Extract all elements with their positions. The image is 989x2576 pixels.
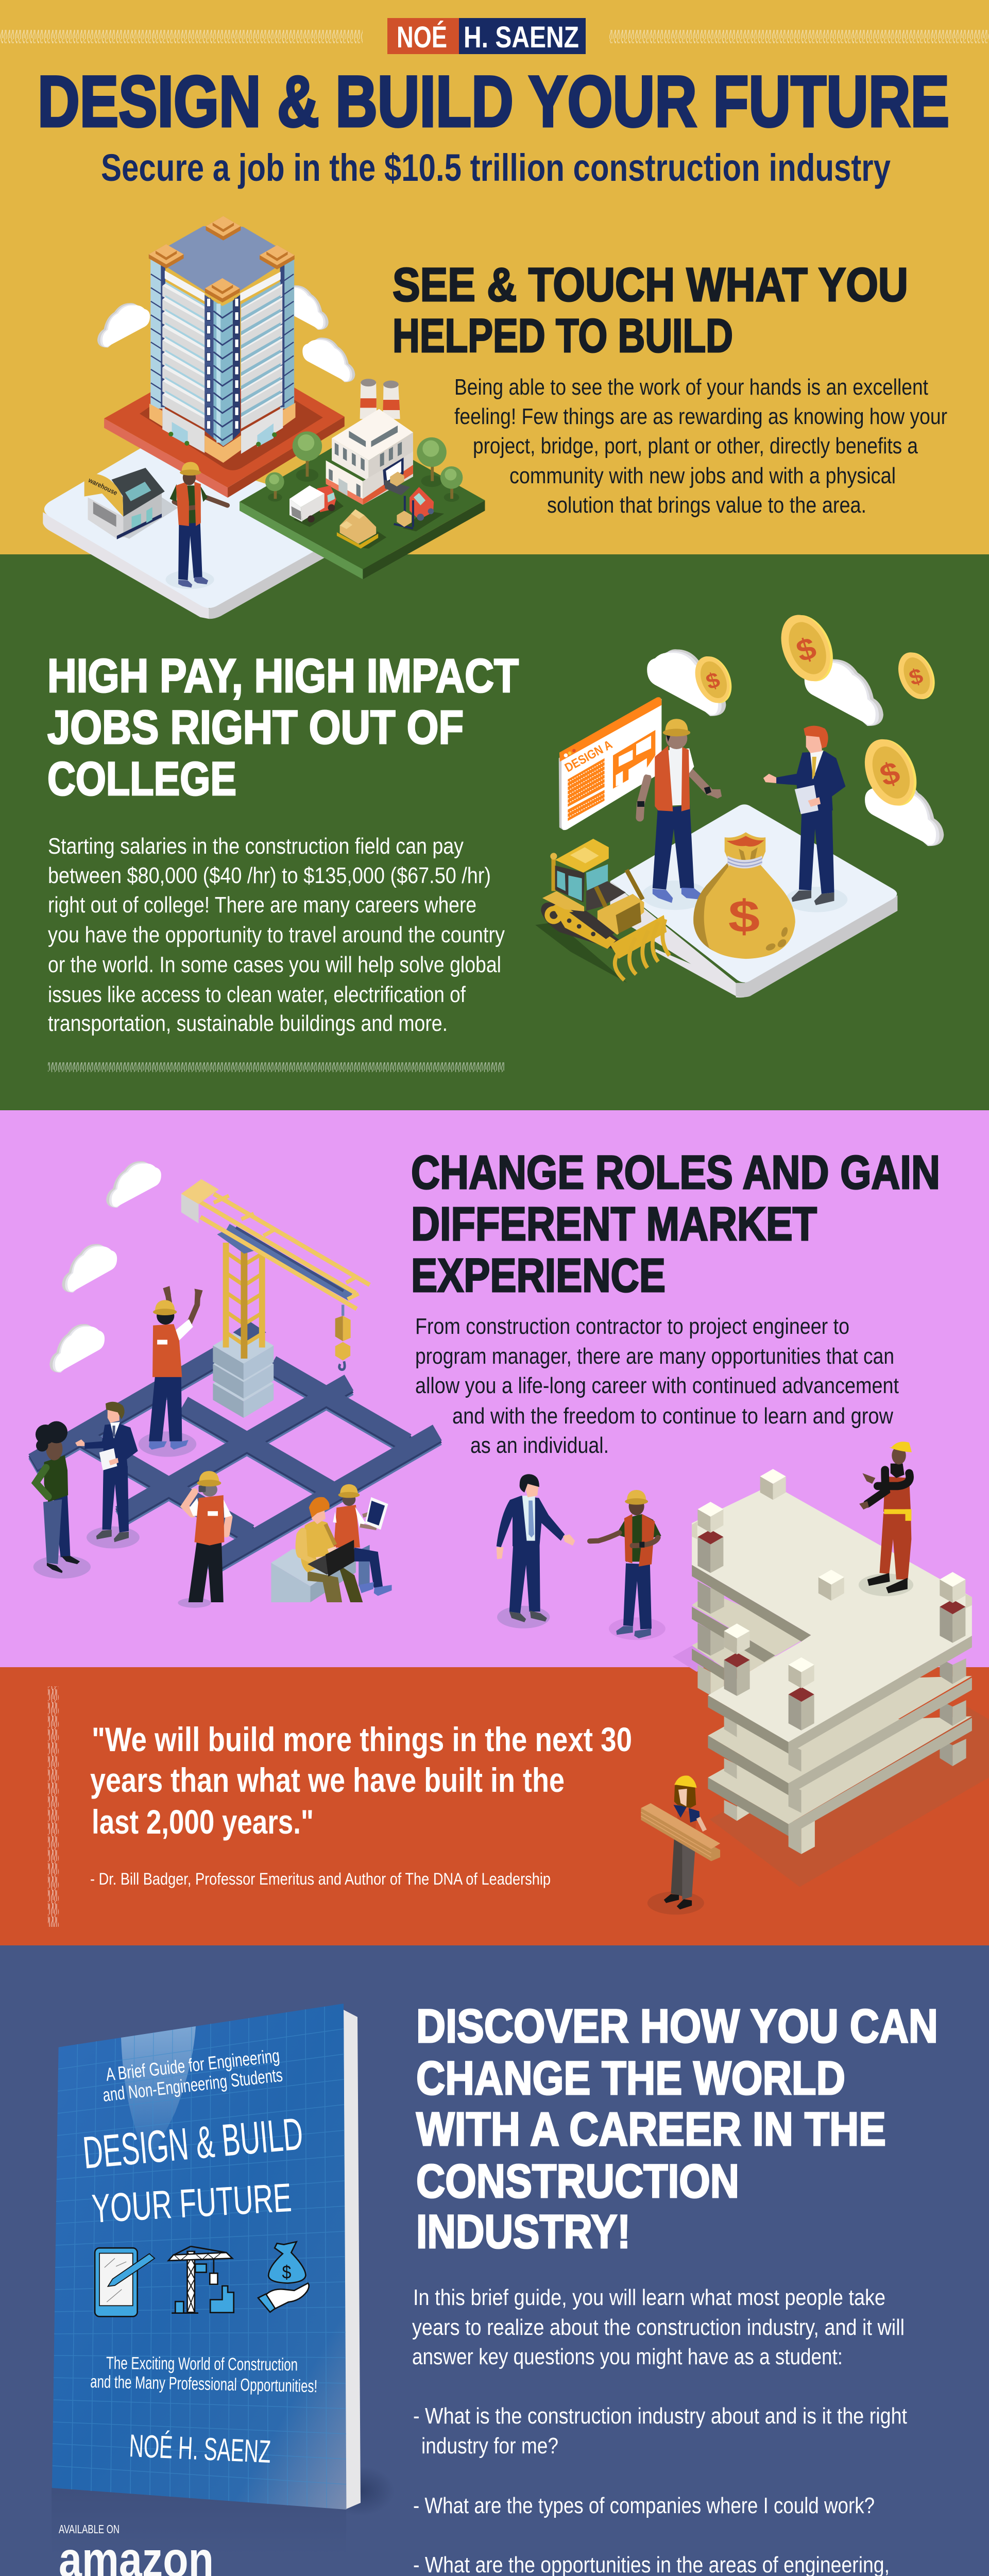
pattern strip: header right <box>609 30 989 43</box>
icon: coin small right <box>892 647 941 704</box>
icon: crane tower and jib <box>181 1179 370 1370</box>
text: book tagline: and the Many Professional Opportunities! <box>90 2372 318 2396</box>
list item: question one: - What is the construction industry about and is it the right <box>413 2403 907 2429</box>
icon: conveyor with box <box>384 471 410 495</box>
text: book subtitle: and Non-Engineering Students <box>101 2064 284 2106</box>
icon: money bag on hand <box>258 2242 309 2312</box>
icon: woman with green top <box>33 1421 91 1579</box>
text block: see and touch paragraph: project, bridge, port, plant or other, directly benefits a <box>473 433 918 459</box>
heading: high pay: JOBS RIGHT OUT OF <box>47 701 464 754</box>
text block: guide intro: years to realize about the construction industry, and it will <box>412 2315 905 2340</box>
icon: red tower platform <box>104 387 345 498</box>
panel: pink change roles section background <box>0 1110 989 1667</box>
text block: high pay paragraph: or the world. In some cases you will help solve global <box>48 952 501 977</box>
icon: worker in orange vest <box>637 719 722 910</box>
text: book tagline: The Exciting World of Construction <box>106 2353 298 2375</box>
text block: change roles paragraph: program manager, there are many opportunities that can <box>415 1344 894 1369</box>
logo: Noé H. Saenz top: NOÉ <box>397 21 447 54</box>
icon: book front cover <box>52 2004 346 2510</box>
text block: high pay paragraph: you have the opportunity to travel around the country <box>48 922 505 947</box>
text block: change roles paragraph: as an individual. <box>470 1433 609 1458</box>
icon: floor plan design board <box>559 697 661 831</box>
panel: orange quote section background <box>0 1667 989 1945</box>
icon: white platform <box>610 804 897 997</box>
text: book subtitle: A Brief Guide for Engineering <box>105 2045 281 2085</box>
heading: see and touch: HELPED TO BUILD <box>393 310 733 362</box>
quote attribution: - Dr. Bill Badger, Professor Emeritus and Author of The DNA of Leadership <box>90 1870 551 1888</box>
icon: book pages <box>344 2010 361 2509</box>
text block: high pay paragraph <box>48 834 505 1036</box>
quote text: years than what we have built in the <box>90 1761 565 1799</box>
text block: high pay paragraph: Starting salaries in the construction field can pay <box>48 834 464 859</box>
icon: warehouse: warehouse <box>87 476 118 497</box>
text block: change roles paragraph <box>415 1314 899 1458</box>
pattern strip: green section <box>48 1062 505 1072</box>
text: book tagline <box>90 2353 318 2396</box>
pattern strip: quote vertical <box>48 1686 59 1927</box>
heading: see and touch: SEE & TOUCH WHAT YOU <box>393 259 908 311</box>
text block: change roles paragraph: allow you a life-long career with continued advancement <box>415 1373 899 1398</box>
illustration: concrete building and team <box>497 1442 989 1914</box>
heading: see and touch <box>393 259 908 362</box>
text: book title <box>81 2108 305 2231</box>
text: book title: DESIGN & BUILD <box>81 2108 305 2178</box>
heading: discover: CONSTRUCTION <box>416 2155 739 2208</box>
quote text: last 2,000 years." <box>92 1803 314 1841</box>
icon: worker with hard hat <box>166 462 227 589</box>
list item: question two: - What are the types of companies where I could work? <box>413 2493 875 2518</box>
icon: yellow bulldozer <box>535 839 670 983</box>
icon: trees <box>265 431 463 502</box>
icon: cloud right <box>276 285 329 330</box>
text block: high pay paragraph: issues like access to clean water, electrification of <box>48 982 466 1007</box>
icon: cloud top <box>106 1161 161 1208</box>
icon: man in suit with notes <box>75 1402 140 1549</box>
panel: green high pay section background <box>0 554 989 1110</box>
heading: change roles: EXPERIENCE <box>411 1249 666 1302</box>
icon: man in suit with paper <box>763 726 847 912</box>
text: book subtitle <box>101 2045 284 2106</box>
icon: forklift <box>394 487 444 531</box>
icon: seated workers on block <box>271 1484 392 1602</box>
text block: high pay paragraph: between $80,000 ($40 /hr) to $135,000 ($67.50 /hr) <box>48 863 491 888</box>
icon: money bag <box>693 832 795 959</box>
text block: change roles paragraph: and with the freedom to continue to learn and grow <box>452 1403 893 1429</box>
icon: businessman handshake <box>497 1474 575 1629</box>
heading: discover: INDUSTRY! <box>416 2206 630 2258</box>
icon: cover blueprint grid <box>53 2007 346 2508</box>
pattern strip: header left <box>0 30 363 43</box>
icon: concrete crane base <box>213 1321 274 1418</box>
icon: concrete building frame <box>692 1469 972 1854</box>
heading: high pay <box>47 650 519 805</box>
icon: worker on phone <box>178 1471 232 1608</box>
icon: cloud lower <box>49 1324 105 1372</box>
icon: cloud right <box>865 779 944 846</box>
icon: coin top <box>772 607 842 689</box>
text: available on: AVAILABLE ON <box>59 2522 120 2536</box>
icon: white platform <box>43 446 330 619</box>
heading: discover: WITH A CAREER IN THE <box>416 2103 886 2156</box>
icon: delivery truck <box>289 485 344 527</box>
icon: apartment tower <box>149 216 295 463</box>
list item: question one: industry for me? <box>421 2433 558 2459</box>
text block: high pay paragraph: transportation, sustainable buildings and more. <box>48 1011 448 1036</box>
icon: cloud with coin left <box>647 649 726 716</box>
heading: discover: CHANGE THE WORLD <box>416 2052 845 2105</box>
text block: see and touch paragraph: solution that brings value to the area. <box>547 493 866 518</box>
logo: Noé H. Saenz top <box>387 18 586 54</box>
heading: change roles: DIFFERENT MARKET <box>411 1198 817 1250</box>
panel: yellow header section background <box>0 0 989 554</box>
icon: pallet of boxes <box>337 509 386 549</box>
icon: worker waving arms <box>139 1286 203 1457</box>
icon: steel beam grid <box>33 1353 437 1569</box>
icon: cloud left <box>97 303 150 347</box>
text block: see and touch paragraph <box>454 375 947 518</box>
icon: smokestacks <box>360 379 400 419</box>
list item: question one <box>413 2403 907 2459</box>
icon: tower crane <box>168 2246 234 2313</box>
illustration: pay, workers and money <box>535 607 944 997</box>
icon: book shadow <box>52 2466 395 2555</box>
icon: coin left <box>689 651 738 708</box>
text block: guide intro: answer key questions you might have as a student: <box>412 2344 843 2369</box>
heading: change roles <box>411 1146 940 1302</box>
icon: cloud middle <box>805 659 883 726</box>
icon: cloud middle <box>62 1244 117 1293</box>
icon: cloud lower right <box>302 337 355 382</box>
text: book author: NOÉ H. SAENZ <box>128 2428 271 2470</box>
icon: money bag: $ <box>728 891 760 942</box>
text block: change roles paragraph: From construction contractor to project engineer to <box>415 1314 849 1339</box>
quote text: "We will build more things in the next 30 <box>92 1720 632 1758</box>
text block: guide intro <box>412 2285 905 2369</box>
illustration: tower, warehouse and factory <box>43 216 485 619</box>
icon: building shadow <box>673 1642 989 1887</box>
icons: tablet, crane and money on hand <box>95 2242 309 2316</box>
illustration: crane and steel grid <box>33 1161 437 1608</box>
quote text <box>90 1720 632 1841</box>
icon: woman carrying planks <box>641 1775 720 1914</box>
logo: Noé H. Saenz top: H. SAENZ <box>464 21 579 54</box>
icon: engineer pointing on roof <box>859 1442 913 1596</box>
heading: high pay: HIGH PAY, HIGH IMPACT <box>47 650 519 702</box>
icon: warehouse <box>84 468 178 539</box>
heading: discover <box>416 2000 938 2258</box>
icon: cover glare <box>121 2026 196 2164</box>
icon: money bag on hand: $ <box>282 2262 291 2283</box>
icon: green factory platform <box>240 447 485 579</box>
text: book title: YOUR FUTURE <box>91 2175 293 2231</box>
text block: high pay paragraph: right out of college! There are many careers where <box>48 892 476 918</box>
panel: blue book section background <box>0 1945 989 2576</box>
text block: guide intro: In this brief guide, you will learn what most people take <box>413 2285 885 2310</box>
text block: see and touch paragraph: community with new jobs and with a physical <box>509 463 896 488</box>
icon: floor plan design board: DESIGN A <box>562 738 615 775</box>
illustration: book cover <box>52 2004 395 2555</box>
icon: coin large right <box>856 732 926 813</box>
icon: factory building <box>326 409 413 505</box>
icon: worker handshake <box>590 1490 666 1640</box>
heading: high pay: COLLEGE <box>47 753 236 805</box>
icon: tablet and pencil <box>95 2248 155 2316</box>
